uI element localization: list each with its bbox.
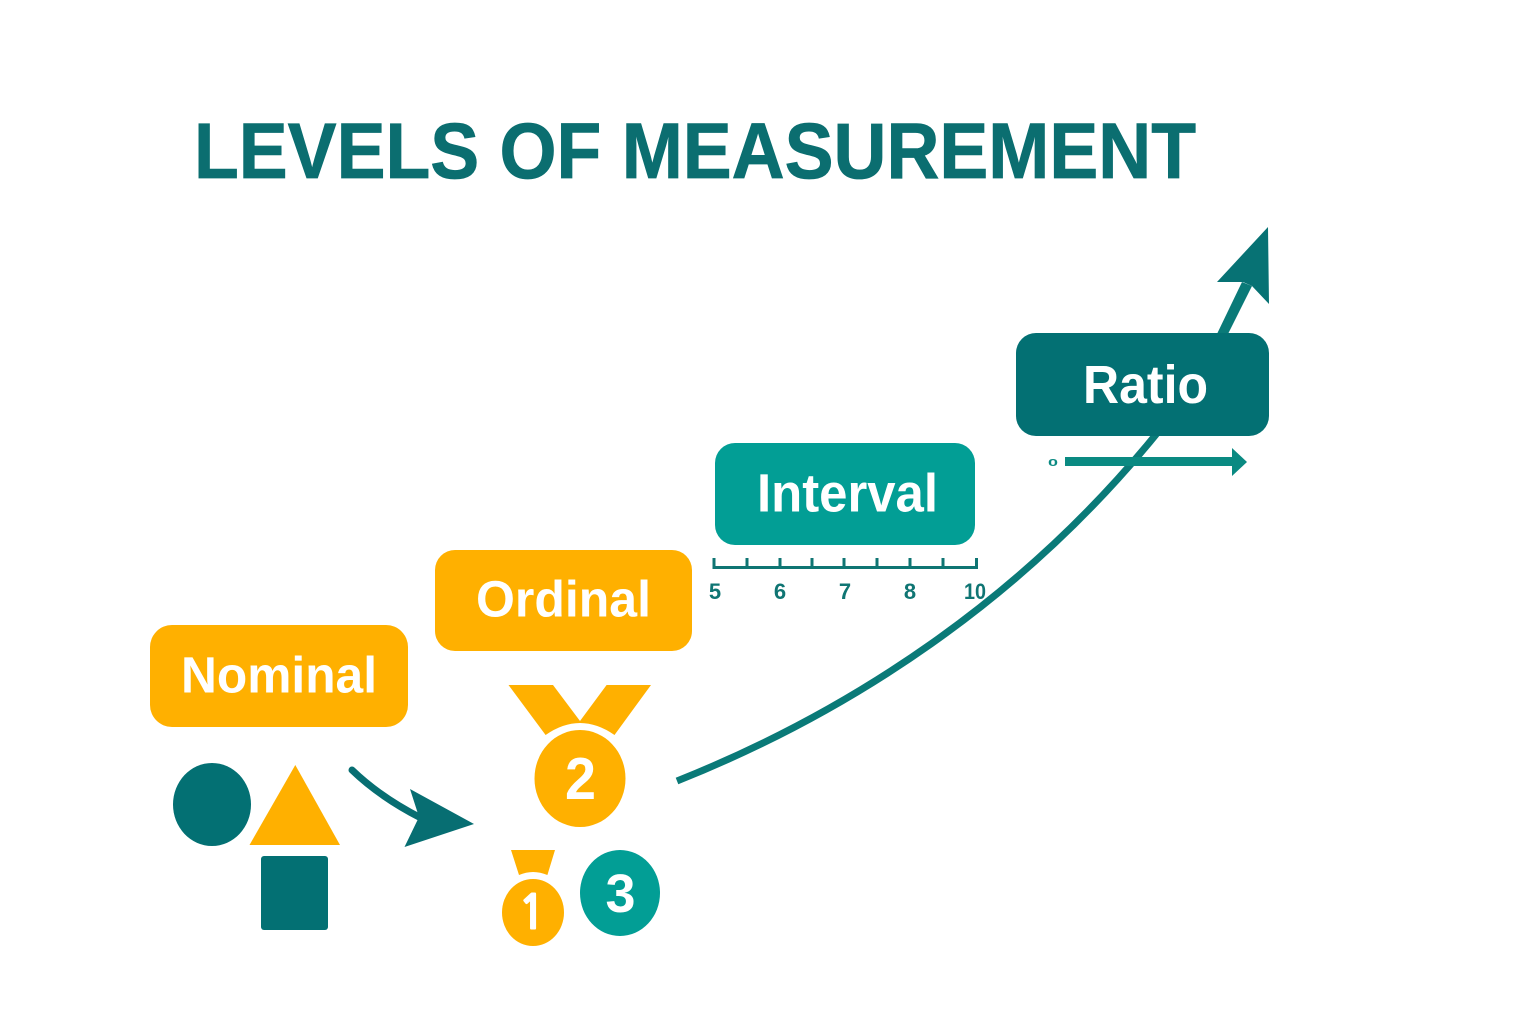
arrow: ratio scale from zero: 0 (1048, 458, 1059, 469)
panel: ratio: Ratio (1083, 355, 1208, 415)
chart: interval scale: 5 (709, 579, 721, 604)
title: LEVELS OF MEASUREMENT (194, 106, 1196, 195)
arrow: ratio scale from zero (1048, 448, 1247, 476)
panel: ordinal: Ordinal (476, 570, 651, 628)
chart: interval scale (709, 558, 986, 604)
icon: medal 3 (580, 850, 660, 936)
arrow: rising progress curve (677, 227, 1269, 781)
panel: nominal: Nominal (181, 646, 377, 704)
panel: nominal (150, 625, 408, 727)
chart: interval scale: 7 (839, 579, 851, 604)
panel: interval (715, 443, 975, 545)
icon: medal 2: 2 (565, 746, 596, 812)
icon: medal 3: 3 (606, 864, 636, 924)
panel: interval: Interval (757, 464, 938, 524)
icon: nominal shapes (173, 763, 340, 930)
arrow: nominal to ordinal (352, 770, 474, 847)
icon: medal 1: 1 (518, 890, 546, 937)
icon: medal 1 (502, 850, 564, 946)
icon: medal 2 (508, 685, 651, 827)
chart: interval scale: 8 (904, 579, 916, 604)
panel: ordinal (435, 550, 692, 651)
panel: ratio (1016, 333, 1269, 436)
chart: interval scale: 10 (964, 579, 986, 604)
chart: interval scale: 6 (774, 579, 786, 604)
